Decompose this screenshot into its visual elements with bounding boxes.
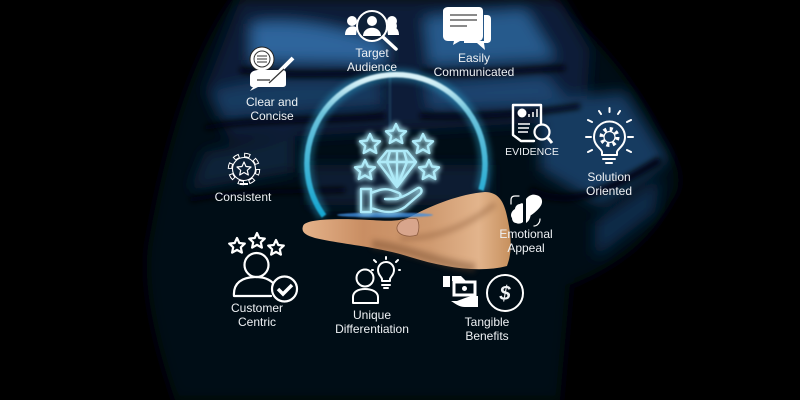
label: Oriented: [586, 184, 632, 198]
item: easily communicated: [434, 7, 514, 79]
item: evidence: [505, 105, 559, 158]
icon: brain and heart: [511, 195, 542, 226]
jacket: [147, 0, 679, 400]
item: customer centric: [229, 233, 297, 329]
item: unique differentiation: [335, 257, 409, 336]
item: target audience: [345, 11, 399, 74]
hand: [302, 192, 511, 269]
label: Appeal: [507, 241, 545, 255]
label: Concise: [250, 109, 294, 123]
icon: badge and pen on bubble: [250, 47, 293, 91]
label: Consistent: [215, 190, 272, 204]
item: tangible benefits: [443, 275, 523, 343]
icon: diamond with stars and hand: [355, 124, 439, 212]
item: clear and concise: [246, 47, 298, 123]
label: Solution: [587, 170, 631, 184]
label: Clear and: [246, 95, 298, 109]
icon: bulb with gear: [586, 108, 633, 163]
label: Audience: [347, 60, 397, 74]
label: Target: [355, 46, 389, 60]
item: solution oriented: [586, 108, 633, 198]
icon: money exchange and dollar coin: $: [498, 283, 511, 305]
label: Customer: [231, 301, 283, 315]
label: Differentiation: [335, 322, 409, 336]
icon: speech bubbles: [443, 7, 491, 50]
label: Centric: [238, 315, 276, 329]
icon: person with stars and check: [229, 233, 297, 302]
beam on palm: [337, 212, 433, 218]
glow ring: [307, 75, 485, 216]
icon: gear with bulb: [230, 155, 258, 184]
label: Benefits: [465, 329, 509, 343]
label: EVIDENCE: [505, 146, 559, 158]
label: Emotional: [499, 227, 553, 241]
icon: person with bulb: [353, 257, 400, 303]
icon: report and magnifier: [513, 105, 552, 143]
item: emotional appeal: [499, 195, 553, 255]
label: Easily: [458, 51, 490, 65]
item: consistent: [215, 155, 272, 204]
label: Unique: [353, 308, 391, 322]
icon: magnifier over people: [345, 11, 399, 49]
label: Communicated: [434, 65, 514, 79]
label: Tangible: [465, 315, 509, 329]
